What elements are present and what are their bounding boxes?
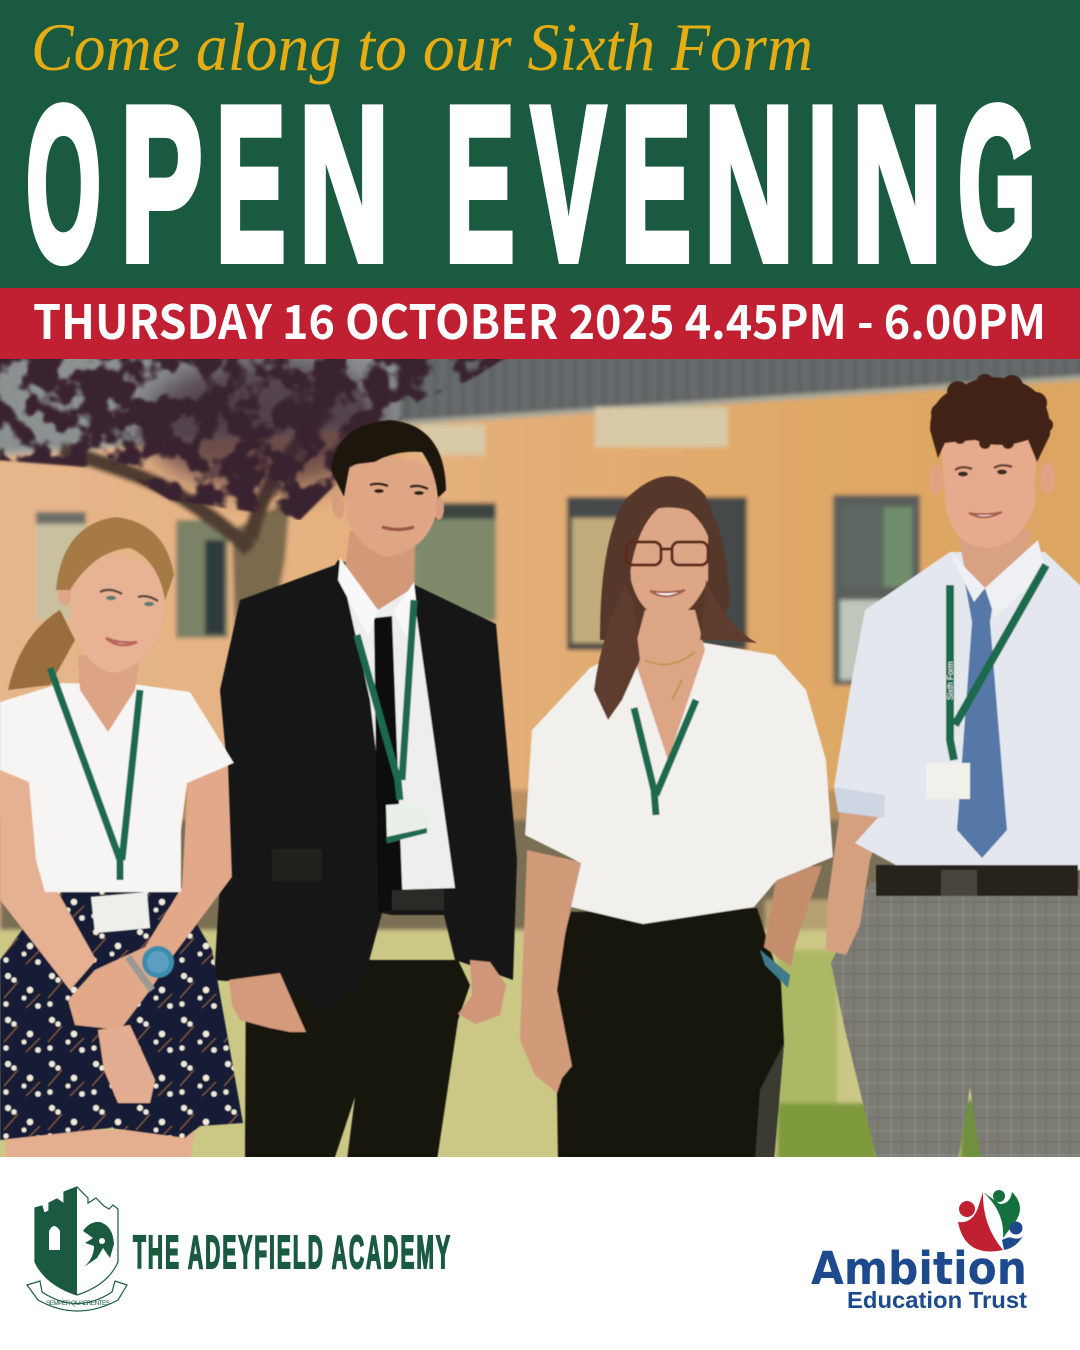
neck — [633, 610, 705, 760]
lower wall and shade — [182, 788, 840, 822]
crest shield — [35, 1187, 118, 1295]
collar — [338, 558, 416, 640]
title: open evening: O — [26, 62, 101, 306]
title: open evening: N — [704, 62, 794, 306]
title: open evening: E — [621, 62, 691, 306]
jacket — [214, 560, 517, 1010]
head — [330, 490, 346, 520]
right forearm and bracelets — [764, 866, 822, 967]
shirt — [834, 552, 1080, 870]
title: open evening — [26, 62, 1036, 306]
face features — [370, 484, 428, 489]
lanyard — [357, 600, 414, 800]
student 3: girl in white shirt — [520, 476, 833, 1160]
school name: THE ADEYFIELD ACADEMY — [133, 1227, 450, 1278]
face features — [100, 590, 158, 601]
title: open evening: P — [120, 62, 202, 306]
wordmark: education trust: Education Trust — [847, 1287, 1027, 1313]
footer panel — [0, 1157, 1080, 1350]
necklace — [645, 652, 695, 700]
date and time: THURSDAY 16 OCTOBER 2025 4.45PM - 6.00PM — [33, 284, 1046, 353]
trousers — [245, 960, 470, 1160]
student 1: girl with floral skirt — [0, 517, 243, 1160]
trousers — [831, 882, 1080, 1160]
head — [58, 578, 72, 606]
title: open evening: V — [532, 62, 606, 306]
hair — [56, 517, 174, 600]
tie — [374, 616, 403, 912]
student 2: boy in black suit — [214, 420, 517, 1160]
photo: four students outside the school — [0, 355, 1080, 1165]
title: open evening: N — [299, 62, 389, 306]
date band — [0, 284, 1080, 359]
title: open evening: E — [445, 62, 514, 306]
forearm — [826, 812, 884, 955]
trousers — [555, 908, 784, 1160]
neck — [345, 530, 415, 610]
icon: helmet — [83, 1222, 114, 1267]
title: open evening: I — [808, 62, 838, 306]
header panel — [0, 0, 1080, 306]
hair strands over shoulder — [594, 585, 640, 720]
tree canopy shade — [145, 360, 385, 490]
id badge — [625, 846, 679, 881]
lanyard — [634, 700, 696, 815]
smile — [650, 590, 685, 596]
tie — [957, 583, 1007, 858]
shirt — [346, 590, 456, 890]
belt — [392, 890, 444, 910]
neck and collar — [957, 530, 1032, 590]
tree foliage — [0, 355, 510, 520]
watch — [142, 946, 174, 978]
photo background: building, tree and grass — [0, 355, 1080, 1165]
floral skirt — [0, 892, 243, 1140]
left forearm and hand — [520, 850, 581, 1093]
icon: three figures — [958, 1190, 1023, 1251]
lanyard — [946, 565, 1046, 760]
right arm and hand — [68, 763, 232, 1030]
lanyard: Sixth Form — [946, 661, 955, 700]
lanyard — [50, 668, 140, 880]
glasses — [626, 542, 708, 565]
hair — [331, 420, 446, 498]
tree trunk and branches — [232, 500, 290, 640]
shirt — [525, 642, 833, 924]
face features — [955, 465, 1012, 470]
title: open evening: N — [852, 62, 942, 306]
belt — [876, 865, 1078, 896]
long hair back — [600, 476, 730, 640]
motto ribbon — [27, 1281, 127, 1311]
wrist band — [128, 957, 152, 990]
ponytail — [8, 610, 75, 690]
id badge — [386, 802, 427, 843]
window — [49, 1226, 60, 1250]
lower forearm — [98, 1025, 155, 1103]
logo: ambition education trust — [811, 1190, 1027, 1313]
legs — [6, 1130, 195, 1160]
logo: the adeyfield academy crest: SEMPER QUAERENTES — [46, 1300, 111, 1307]
head — [929, 465, 943, 495]
curly hair — [930, 374, 1053, 462]
id badge — [926, 763, 970, 799]
script heading: Come along to our Sixth Form — [31, 9, 813, 85]
title: open evening: E — [216, 62, 286, 306]
student 4: boy with blue tie — [826, 374, 1080, 1160]
neck — [78, 655, 140, 732]
pocket flap — [272, 849, 322, 881]
t-shirt — [0, 683, 234, 892]
id badge — [91, 892, 150, 933]
wordmark: ambition: Ambition — [811, 1242, 1027, 1295]
left arm — [0, 775, 96, 990]
head — [628, 508, 708, 618]
hands — [229, 973, 306, 1032]
logo: the adeyfield academy crest — [27, 1187, 127, 1311]
